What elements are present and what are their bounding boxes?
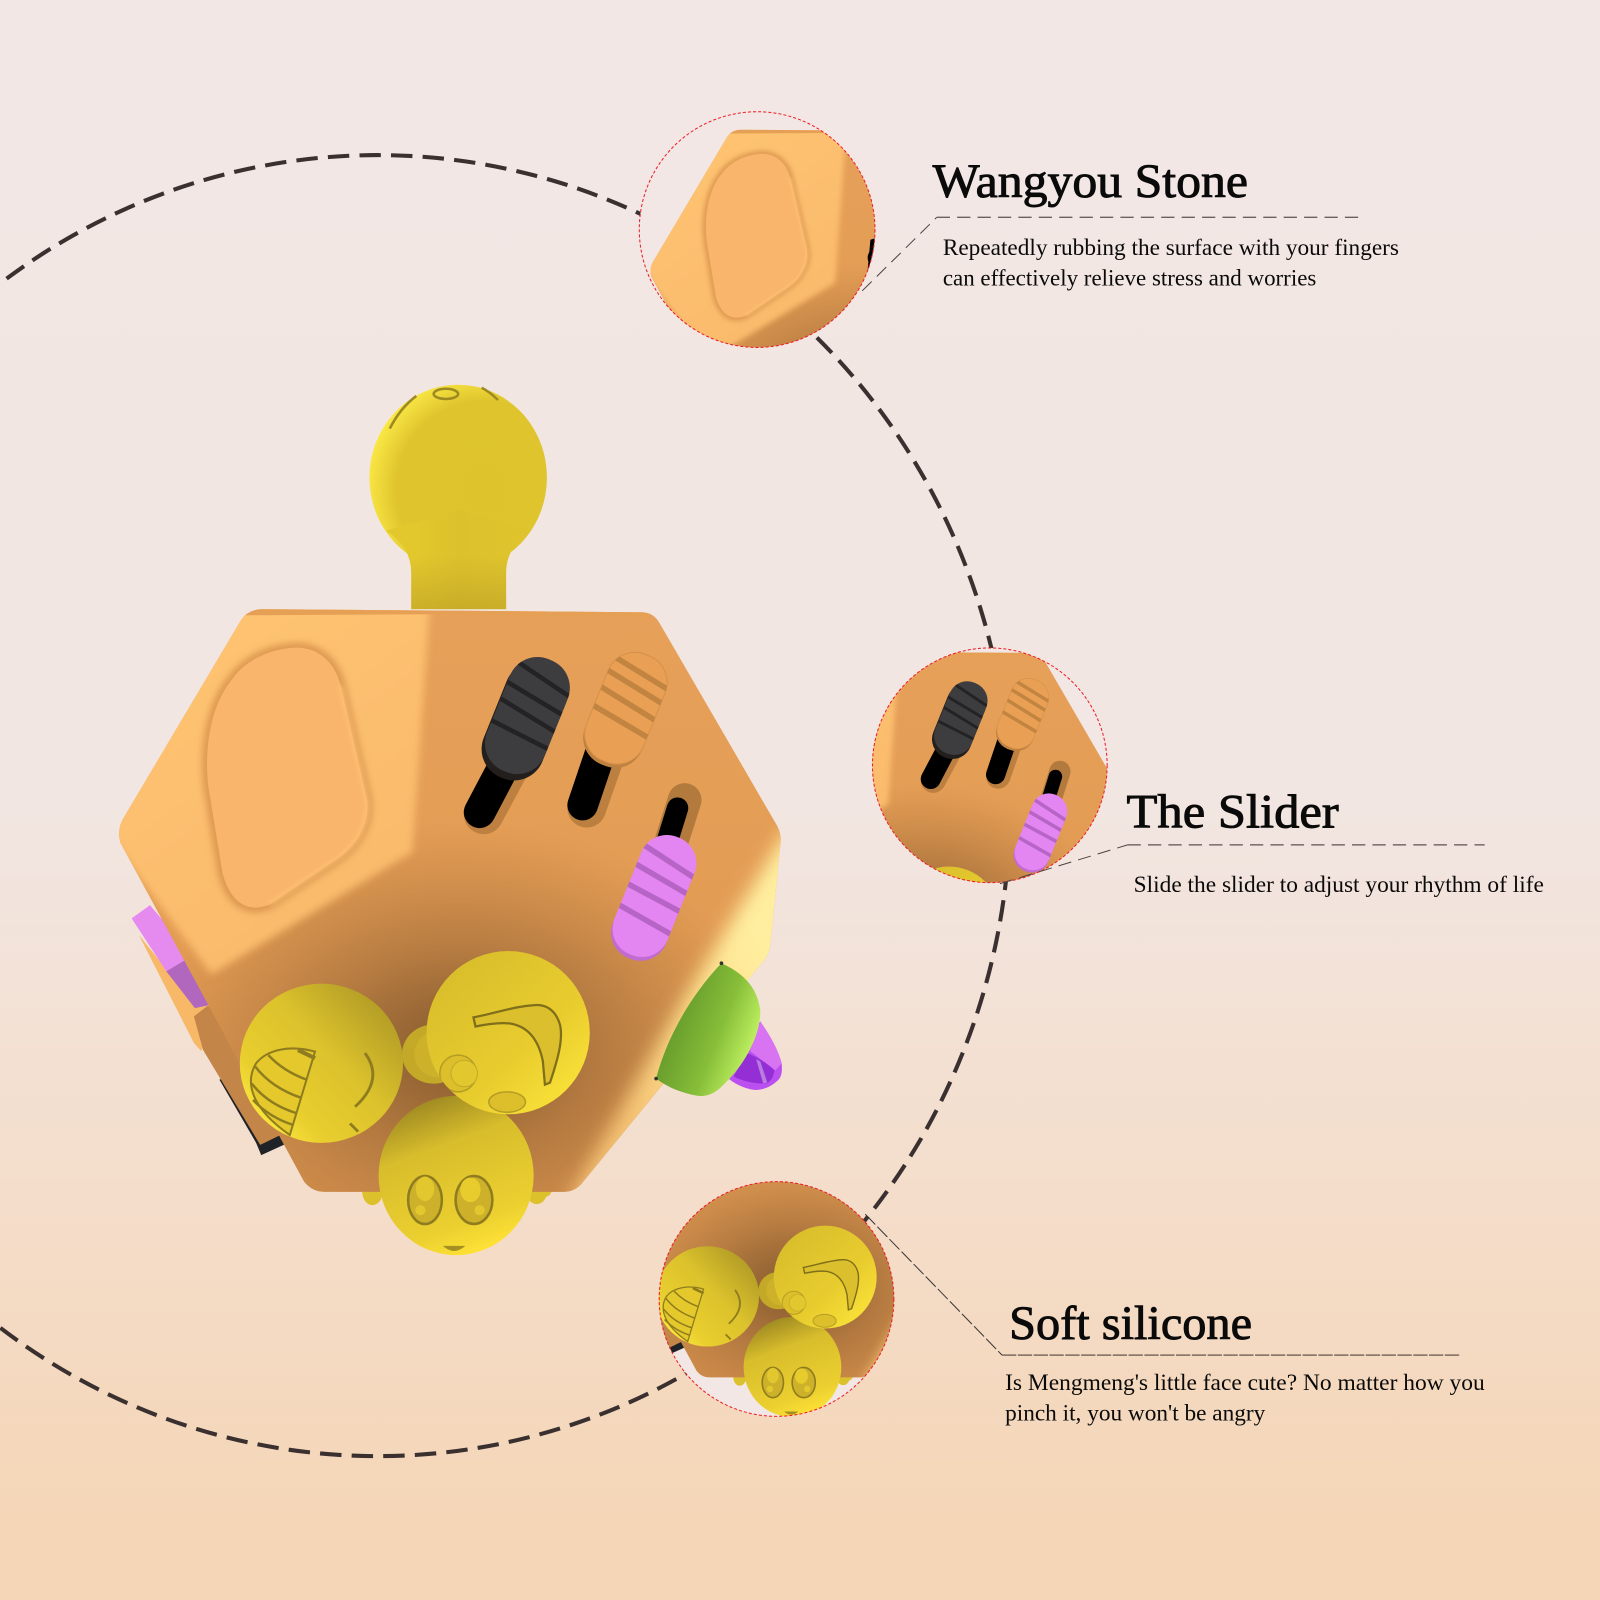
smiley ball: eyes — [379, 1096, 534, 1255]
small yellow feet under body — [362, 1179, 552, 1205]
description: Soft silicone: pinch it, you won't be angry — [1005, 1400, 1266, 1425]
small back ball — [402, 1024, 465, 1084]
rubbing stone recess — [207, 648, 368, 908]
leader line: Wangyou Stone — [862, 217, 1363, 291]
purple slider — [603, 827, 705, 969]
heading: Soft silicone: Soft silicone — [1009, 1297, 1252, 1350]
description: The Slider: Slide the slider to adjust your rhythm of life — [1134, 872, 1544, 897]
callout lens: Soft silicone — [658, 1181, 894, 1417]
green push button — [654, 961, 760, 1096]
light upper-left face — [102, 602, 430, 974]
heading: Wangyou Stone: Wangyou Stone — [933, 155, 1248, 208]
dashed orbit ring — [0, 155, 1010, 1456]
leader line: Soft silicone — [865, 1214, 1459, 1355]
slider slots — [480, 730, 685, 867]
black slider — [472, 648, 579, 790]
smiley ball: winking with stripes — [240, 984, 403, 1143]
description: Wangyou Stone: can effectively relieve stress and worries — [943, 266, 1316, 291]
callout lens: Wangyou Stone — [638, 111, 876, 348]
heading: The Slider: The Slider — [1127, 786, 1339, 839]
callout lens: The Slider — [872, 648, 1108, 884]
description: Soft silicone: Is Mengmeng's little face cute? No matter how you — [1005, 1370, 1485, 1395]
black base and orange side tab — [194, 1005, 296, 1155]
light lower-right face — [566, 832, 816, 1204]
fidget toy illustration — [102, 385, 816, 1281]
yellow knob on top — [369, 385, 547, 609]
smiley ball: eyebrow — [427, 951, 590, 1114]
leader line: The Slider — [1000, 845, 1485, 884]
purple curl behind green button — [729, 1021, 782, 1090]
pink flap on left side — [132, 905, 219, 1051]
orange slider — [575, 644, 676, 776]
description: Soft silicone — [1005, 1370, 1485, 1425]
description: Wangyou Stone — [943, 235, 1399, 291]
description: Wangyou Stone: Repeatedly rubbing the surface with your fingers — [943, 235, 1399, 260]
dodecahedron body — [102, 602, 816, 1281]
dark shading around balls — [143, 821, 776, 1281]
